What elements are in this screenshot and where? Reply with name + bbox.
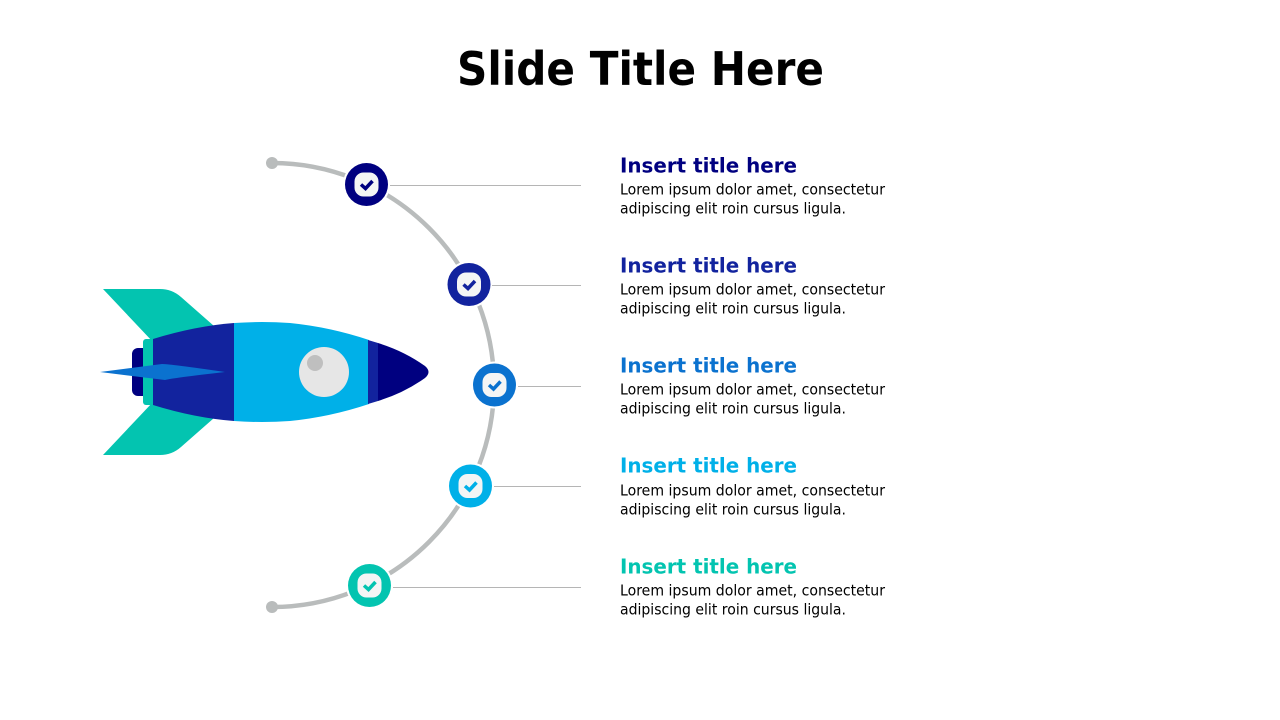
flame: [100, 364, 225, 380]
title: Slide Title Here: [457, 42, 824, 96]
body middle section: [234, 322, 369, 422]
text block 3: adipiscing elit roin cursus ligula.: [620, 400, 846, 418]
nose cone: [378, 343, 428, 401]
text block 4: adipiscing elit roin cursus ligula.: [620, 500, 846, 518]
node 1: [343, 161, 390, 208]
rocket illustration: [100, 289, 428, 455]
lower fin: [103, 402, 214, 455]
window highlight: [307, 355, 323, 371]
window: [299, 347, 349, 397]
leader line 4: [494, 486, 581, 488]
leader line 3: [518, 386, 581, 388]
text block 5: Lorem ipsum dolor amet, consectetur: [620, 582, 886, 600]
text block 1: Lorem ipsum dolor amet, consectetur: [620, 180, 886, 198]
text block 1: Insert title here: [620, 154, 797, 178]
engine block: [132, 348, 152, 396]
node 3: [471, 362, 518, 408]
text block 5: [620, 554, 886, 618]
text block 4: [620, 454, 886, 518]
engine collar: [143, 339, 157, 405]
text block 4: Lorem ipsum dolor amet, consectetur: [620, 482, 886, 500]
timeline arc: [266, 157, 494, 613]
leader line 1: [390, 184, 581, 186]
text block 3: Lorem ipsum dolor amet, consectetur: [620, 380, 886, 398]
text block 4: Insert title here: [620, 454, 797, 478]
text block 5: Insert title here: [620, 554, 797, 578]
text block 1: adipiscing elit roin cursus ligula.: [620, 200, 846, 218]
text block 2: [620, 254, 886, 318]
text block 3: Insert title here: [620, 354, 797, 378]
body rear section: [153, 323, 234, 421]
text block 2: Insert title here: [620, 254, 797, 278]
text block 3: [620, 354, 886, 418]
body band: [368, 340, 378, 404]
leader line 5: [393, 586, 581, 588]
upper fin: [103, 289, 214, 342]
text block 5: adipiscing elit roin cursus ligula.: [620, 600, 846, 618]
text block 1: [620, 154, 886, 218]
leader line 2: [492, 284, 581, 286]
node 2: [446, 261, 492, 308]
node 5: [346, 562, 393, 609]
node 4: [447, 462, 494, 510]
text block 2: adipiscing elit roin cursus ligula.: [620, 300, 846, 318]
text block 2: Lorem ipsum dolor amet, consectetur: [620, 280, 886, 298]
